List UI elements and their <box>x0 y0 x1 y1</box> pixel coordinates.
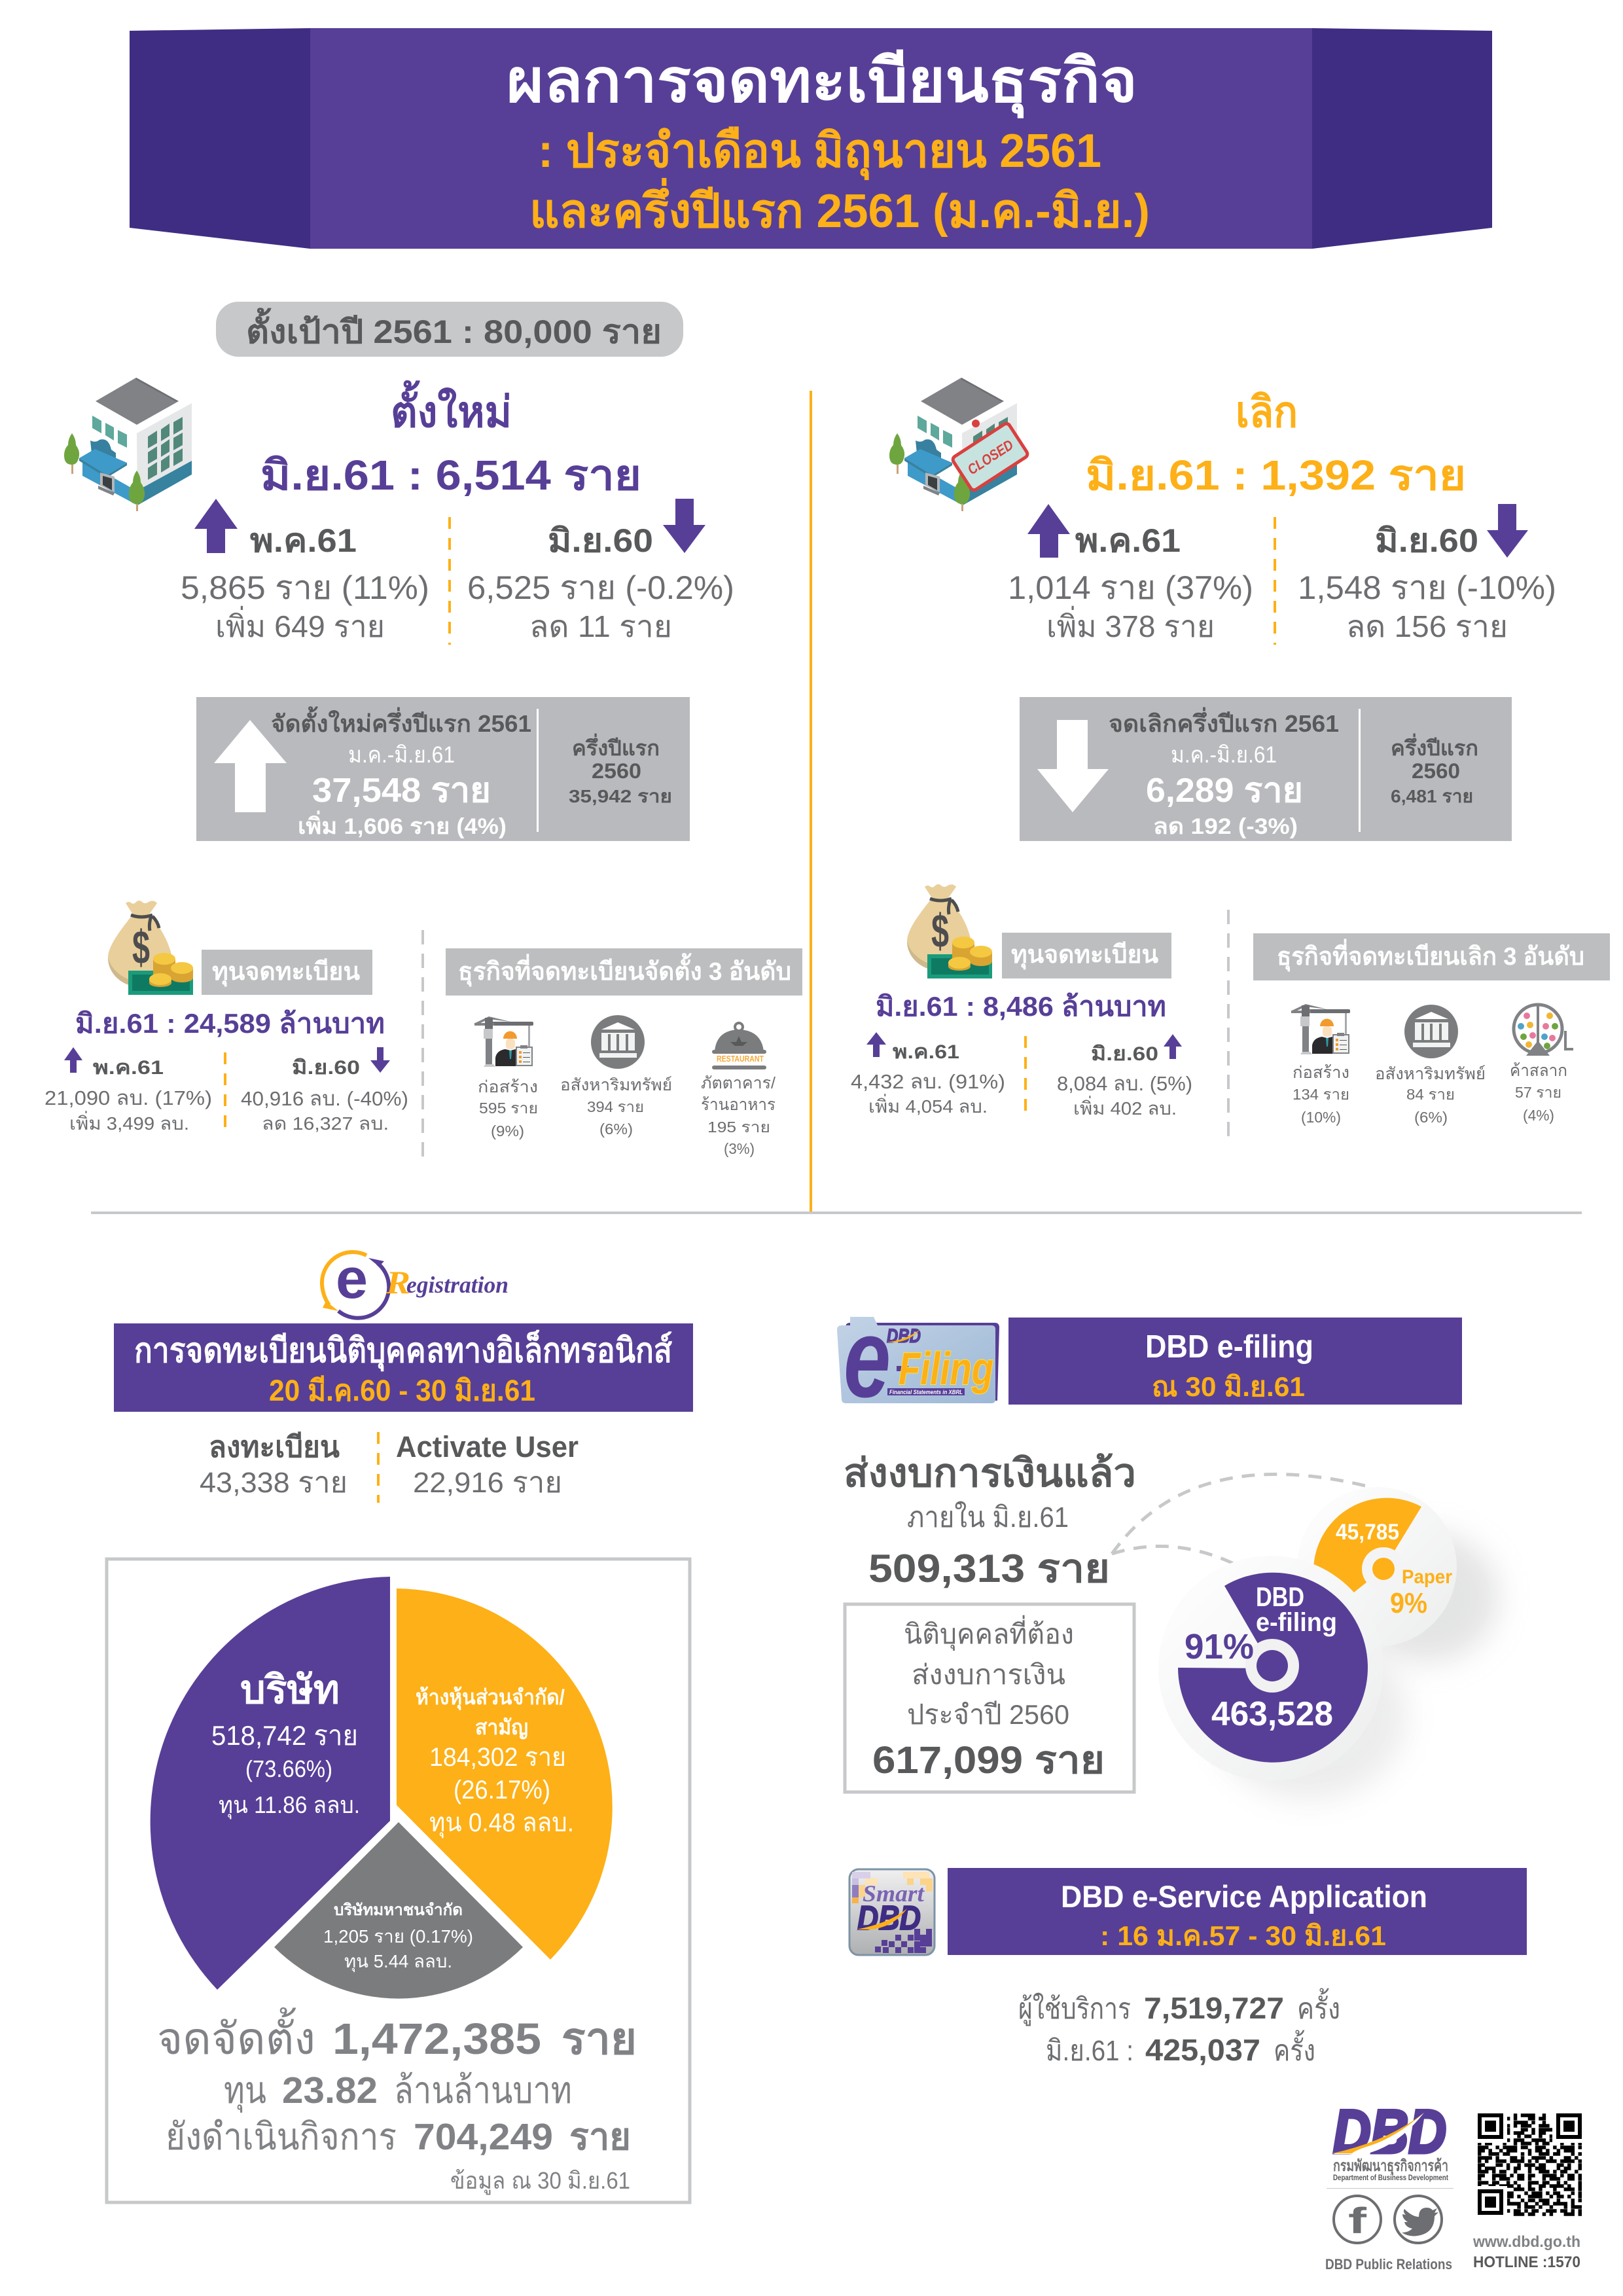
header banner <box>130 28 1492 249</box>
pie slice: company: ทุน 11.86 ลลบ. <box>219 1791 360 1820</box>
month comparison <box>1008 522 1253 643</box>
capital year comparison: มิ.ย.60 <box>292 1057 360 1079</box>
arrow down <box>370 1047 390 1073</box>
half-year main text <box>1109 707 1339 839</box>
icon: restaurant <box>712 1023 766 1069</box>
restaurant text: (3%) <box>724 1140 755 1157</box>
capital month comparison: เพิ่ม 3,499 ลบ. <box>69 1111 189 1134</box>
heading: closed: เลิก <box>1236 387 1298 436</box>
lottery text: (4%) <box>1523 1107 1554 1124</box>
month comparison: 5,865 ราย (11%) <box>181 569 429 606</box>
pie slice: partnership: ทุน 0.48 ลลบ. <box>429 1808 574 1839</box>
capital year comparison: ลด 16,327 ลบ. <box>262 1113 389 1134</box>
restaurant text: ร้านอาหาร <box>701 1096 776 1114</box>
logo: e-Registration: egistration <box>406 1272 508 1298</box>
real estate text: อสังหาริมทรัพย์ <box>1375 1065 1486 1083</box>
capital year comparison: 40,916 ลบ. (-40%) <box>241 1087 408 1110</box>
arrow up <box>1164 1034 1182 1059</box>
pie slice: public company: บริษัทมหาชนจำกัด <box>334 1901 463 1919</box>
arrow down <box>663 499 705 553</box>
half-year main text <box>271 706 531 839</box>
year comparison: ลด 156 ราย <box>1346 609 1508 643</box>
required filers box <box>845 1604 1134 1792</box>
QR code <box>1476 2111 1584 2217</box>
capital month comparison <box>45 1057 212 1134</box>
heading: e-registration: 20 มี.ค.60 - 30 มิ.ย.61 <box>269 1374 535 1407</box>
real estate text: (6%) <box>599 1121 633 1138</box>
heading: e-filing: ณ 30 มิ.ย.61 <box>1152 1371 1305 1402</box>
heading: e-filing: DBD e-filing <box>1145 1329 1313 1365</box>
panel: half-year closed <box>1020 697 1512 841</box>
half-year comparison: ครึ่งปีแรก <box>1391 733 1478 760</box>
capital figure: มิ.ย.61 : 24,589 ล้านบาท <box>75 1008 385 1039</box>
service users this month: มิ.ย.61 : <box>1046 2035 1133 2067</box>
slice: paper: Paper <box>1402 1566 1452 1588</box>
logo: DBD: DBD <box>1333 2097 1446 2166</box>
panel: top 3 new <box>446 948 802 1157</box>
required filers box: นิติบุคคลที่ต้อง <box>904 1615 1074 1651</box>
restaurant text <box>701 1074 776 1157</box>
slice: paper: 9% <box>1390 1587 1427 1619</box>
heading: e-registration <box>114 1323 693 1412</box>
logo: e-Registration: R <box>385 1264 410 1300</box>
icon: white up arrow <box>214 720 287 812</box>
real estate text: (6%) <box>1414 1109 1448 1126</box>
service users: 7,519,727 <box>1144 1991 1284 2025</box>
capital figure: มิ.ย.61 : 8,486 ล้านบาท <box>876 991 1166 1022</box>
totals: registered: 1,472,385 <box>332 2015 541 2064</box>
half-year comparison <box>569 733 672 806</box>
pie slice: company: (73.66%) <box>245 1755 332 1782</box>
year comparison: ลด 11 ราย <box>529 609 672 643</box>
heading: e-service: DBD e-Service Application <box>1061 1879 1427 1914</box>
month comparison: เพิ่ม 378 ราย <box>1046 605 1215 643</box>
capital month comparison: 4,432 ลบ. (91%) <box>851 1070 1005 1093</box>
month comparison: พ.ค.61 <box>250 522 357 559</box>
subtitle line one: : ประจำเดือน มิถุนายน 2561 <box>538 125 1101 181</box>
icon: facebook: f <box>1348 2200 1367 2241</box>
arrow down <box>1487 504 1528 558</box>
capital year comparison <box>241 1057 408 1134</box>
icon: construction <box>474 1016 533 1067</box>
slice: e-filing: 463,528 <box>1211 1695 1333 1733</box>
service users this month: 425,037 <box>1145 2033 1260 2067</box>
pie slice: partnership: 184,302 ราย <box>429 1743 566 1772</box>
restaurant text: 195 ราย <box>707 1119 770 1136</box>
donut chart: filing share <box>1112 1474 1499 1800</box>
month comparison: เพิ่ม 649 ราย <box>215 605 385 643</box>
icon: twitter <box>1395 2196 1442 2243</box>
real estate text: 84 ราย <box>1406 1086 1455 1103</box>
restaurant text: ภัตตาคาร/ <box>701 1074 776 1092</box>
headline figure: มิ.ย.61 : 6,514 ราย <box>260 452 641 499</box>
construction text: ก่อสร้าง <box>1293 1064 1349 1082</box>
half-year comparison: 6,481 ราย <box>1391 786 1473 806</box>
registered users stats: 22,916 ราย <box>413 1467 562 1499</box>
heading: e-filing <box>1008 1318 1462 1405</box>
totals: operating: 704,249 <box>414 2116 553 2158</box>
target pill <box>216 302 683 357</box>
submitted statements <box>844 1451 1136 1590</box>
registered users stats: ลงทะเบียน <box>209 1430 340 1463</box>
logo: e-filing <box>837 1295 999 1421</box>
arrow up <box>194 499 238 553</box>
top 3 label <box>1253 933 1610 980</box>
logo: DBD: กรมพัฒนาธุรกิจการค้า <box>1333 2157 1448 2176</box>
capital year comparison <box>1057 1043 1192 1119</box>
icon: closed building <box>889 378 1029 511</box>
icon: building <box>64 378 192 511</box>
logo: e-filing: e <box>844 1295 891 1421</box>
subtitle line two: และครึ่งปีแรก 2561 (ม.ค.-มิ.ย.) <box>529 177 1150 238</box>
year comparison: 6,525 ราย (-0.2%) <box>467 569 734 606</box>
totals: operating <box>166 2116 631 2158</box>
pie slice: company <box>151 1577 390 1990</box>
logo: e-filing: Financial Statements in XBRL <box>889 1389 963 1395</box>
half-year main text: จดเลิกครึ่งปีแรก 2561 <box>1109 707 1339 737</box>
year comparison <box>467 522 734 643</box>
social caption: DBD Public Relations <box>1325 2256 1452 2272</box>
required filers box: ประจำปี 2560 <box>907 1699 1069 1730</box>
slice: e-filing: 91% <box>1185 1627 1254 1666</box>
pie slice: partnership: สามัญ <box>475 1715 528 1740</box>
capital month comparison: 21,090 ลบ. (17%) <box>45 1086 212 1109</box>
month comparison <box>181 522 429 643</box>
hotline: HOTLINE :1570 <box>1473 2253 1580 2271</box>
real estate text <box>1375 1065 1486 1126</box>
panel: capital closed <box>851 884 1192 1119</box>
icon: money bag <box>907 884 992 978</box>
month comparison: 1,014 ราย (37%) <box>1008 569 1253 606</box>
logo: e-filing: Filing <box>899 1343 993 1394</box>
logo: Smart DBD app: Smart <box>863 1880 925 1907</box>
service users this month <box>1046 2030 1315 2067</box>
capital month comparison <box>851 1041 1005 1117</box>
registered users stats: Activate User <box>396 1430 579 1463</box>
submitted statements: 509,313 ราย <box>868 1547 1110 1590</box>
capital year comparison: มิ.ย.60 <box>1091 1043 1158 1065</box>
pie slice: partnership <box>397 1588 613 1960</box>
heading: e-service <box>948 1868 1527 1955</box>
capital year comparison: 8,084 ลบ. (5%) <box>1057 1072 1192 1095</box>
real estate text <box>560 1076 672 1138</box>
target pill: ตั้งเป้าปี 2561 : 80,000 ราย <box>246 308 662 350</box>
pie slice: partnership: (26.17%) <box>454 1776 550 1804</box>
half-year comparison: ครึ่งปีแรก <box>572 733 660 760</box>
year comparison <box>1298 522 1556 643</box>
totals: registered: ราย <box>562 2015 637 2064</box>
year comparison: 1,548 ราย (-10%) <box>1298 569 1556 606</box>
submitted statements: ส่งงบการเงินแล้ว <box>844 1451 1136 1495</box>
required filers box: ส่งงบการเงิน <box>912 1659 1065 1690</box>
lottery text: 57 ราย <box>1515 1084 1561 1101</box>
panel: new registrations <box>64 378 734 645</box>
capital month comparison: เพิ่ม 4,054 ลบ. <box>868 1094 988 1117</box>
pie slice: public company: ทุน 5.44 ลลบ. <box>344 1951 452 1973</box>
capital label: ทุนจดทะเบียน <box>1011 941 1158 970</box>
icon: facebook <box>1334 2196 1381 2243</box>
slice: paper: 45,785 <box>1336 1520 1399 1545</box>
heading: e-service: : 16 ม.ค.57 - 30 มิ.ย.61 <box>1100 1920 1386 1951</box>
panel: capital new <box>45 901 408 1136</box>
month comparison: พ.ค.61 <box>1075 522 1181 559</box>
arrow up <box>1027 504 1070 558</box>
icon: construction <box>1291 1004 1350 1054</box>
panel: top 3 closed <box>1253 933 1610 1126</box>
service users <box>1018 1988 1340 2026</box>
icon: white down arrow <box>1037 720 1109 812</box>
half-year comparison: 2560 <box>1412 759 1460 783</box>
construction text: ก่อสร้าง <box>478 1078 538 1096</box>
totals: operating: ยังดำเนินกิจการ <box>166 2116 397 2158</box>
real estate text: 394 ราย <box>587 1098 644 1115</box>
totals: operating: ราย <box>569 2116 631 2158</box>
real estate text: อสังหาริมทรัพย์ <box>560 1076 672 1094</box>
registered users stats: 43,338 ราย <box>200 1467 348 1499</box>
totals: capital: ล้านล้านบาท <box>394 2070 572 2111</box>
half-year main text: จัดตั้งใหม่ครึ่งปีแรก 2561 <box>271 706 531 737</box>
totals: registered <box>157 2007 637 2064</box>
pie slice: partnership: ห้างหุ้นส่วนจำกัด/ <box>416 1685 565 1711</box>
construction text: (9%) <box>491 1122 524 1139</box>
service users this month: ครั้ง <box>1274 2030 1315 2067</box>
logo: e-Registration <box>322 1247 508 1318</box>
icon: real estate <box>591 1015 645 1069</box>
service users: ผู้ใช้บริการ <box>1018 1992 1131 2026</box>
totals: capital <box>224 2070 572 2113</box>
half-year main text: เพิ่ม 1,606 ราย (4%) <box>298 810 507 839</box>
title: ผลการจดทะเบียนธุรกิจ <box>507 48 1137 118</box>
slice: paper <box>1313 1498 1452 1619</box>
construction text: 595 ราย <box>479 1100 538 1117</box>
half-year main text: ม.ค.-มิ.ย.61 <box>1171 742 1277 768</box>
arrow up <box>866 1032 886 1057</box>
construction text <box>1293 1064 1349 1126</box>
top 3 label: ธุรกิจที่จดทะเบียนเลิก 3 อันดับ <box>1277 939 1584 972</box>
capital label <box>1002 933 1171 978</box>
icon: lottery wheel <box>1514 1005 1573 1056</box>
pie slice: company: บริษัท <box>240 1668 340 1712</box>
capital label <box>202 950 372 995</box>
logo: e-Registration: e <box>336 1247 368 1310</box>
totals: registered: จดจัดตั้ง <box>157 2007 315 2064</box>
totals: capital: 23.82 <box>282 2070 378 2111</box>
construction text: (10%) <box>1301 1109 1341 1126</box>
half-year main text: 6,289 ราย <box>1146 772 1303 810</box>
slice: e-filing: e-filing <box>1256 1608 1337 1637</box>
half-year comparison: 2560 <box>592 759 641 783</box>
panel: closed registrations <box>889 378 1556 645</box>
panel: half-year new <box>196 697 690 841</box>
submitted statements: ภายใน มิ.ย.61 <box>907 1501 1069 1534</box>
top 3 label: ธุรกิจที่จดทะเบียนจัดตั้ง 3 อันดับ <box>458 953 791 987</box>
half-year main text: ม.ค.-มิ.ย.61 <box>348 742 455 768</box>
top 3 label <box>446 948 802 996</box>
construction text: 134 ราย <box>1293 1086 1349 1103</box>
arrow up <box>64 1047 82 1073</box>
half-year main text: 37,548 ราย <box>312 772 491 810</box>
half-year main text: ลด 192 (-3%) <box>1153 814 1298 839</box>
icon: money bag <box>108 901 193 995</box>
capital month comparison: พ.ค.61 <box>93 1057 164 1079</box>
service users: ครั้ง <box>1297 1988 1340 2025</box>
headline figure: มิ.ย.61 : 1,392 ราย <box>1086 452 1466 499</box>
slice: e-filing <box>1178 1573 1368 1763</box>
logo: Smart DBD app <box>849 1869 935 1955</box>
lottery text: ค้าสลาก <box>1510 1062 1567 1080</box>
data note: ข้อมูล ณ 30 มิ.ย.61 <box>450 2167 630 2195</box>
pie slice: public company: 1,205 ราย (0.17%) <box>323 1926 473 1946</box>
logo: Smart DBD app: DBD <box>857 1899 921 1937</box>
capital label: ทุนจดทะเบียน <box>212 958 360 987</box>
half-year comparison: 35,942 ราย <box>569 786 672 806</box>
panel: entity pie chart <box>107 1559 690 2202</box>
registered users stats <box>200 1430 579 1503</box>
logo: DBD: Department of Business Development <box>1333 2173 1448 2182</box>
capital month comparison: พ.ค.61 <box>893 1041 959 1063</box>
icon: restaurant: RESTAURANT <box>717 1054 764 1064</box>
logo: e-filing: DBD <box>887 1325 921 1347</box>
pie slice: public company <box>274 1822 523 1999</box>
slice: e-filing: DBD <box>1256 1581 1304 1612</box>
year comparison: มิ.ย.60 <box>1375 522 1478 559</box>
icon: closed building: CLOSED <box>965 437 1016 478</box>
icon: real estate <box>1404 1005 1458 1058</box>
half-year comparison <box>1391 733 1478 806</box>
heading: e-registration: การจดทะเบียนนิติบุคคลทางอิเล็กทรอนิกส์ <box>134 1330 672 1372</box>
capital year comparison: เพิ่ม 402 ลบ. <box>1073 1096 1177 1119</box>
year comparison: มิ.ย.60 <box>548 522 653 559</box>
totals: capital: ทุน <box>224 2070 266 2113</box>
pie slice: company: 518,742 ราย <box>211 1720 358 1751</box>
required filers box: 617,099 ราย <box>872 1739 1105 1782</box>
construction text <box>478 1078 538 1139</box>
heading: new: ตั้งใหม่ <box>391 380 512 436</box>
lottery text <box>1510 1062 1567 1124</box>
website: www.dbd.go.th <box>1472 2233 1580 2251</box>
